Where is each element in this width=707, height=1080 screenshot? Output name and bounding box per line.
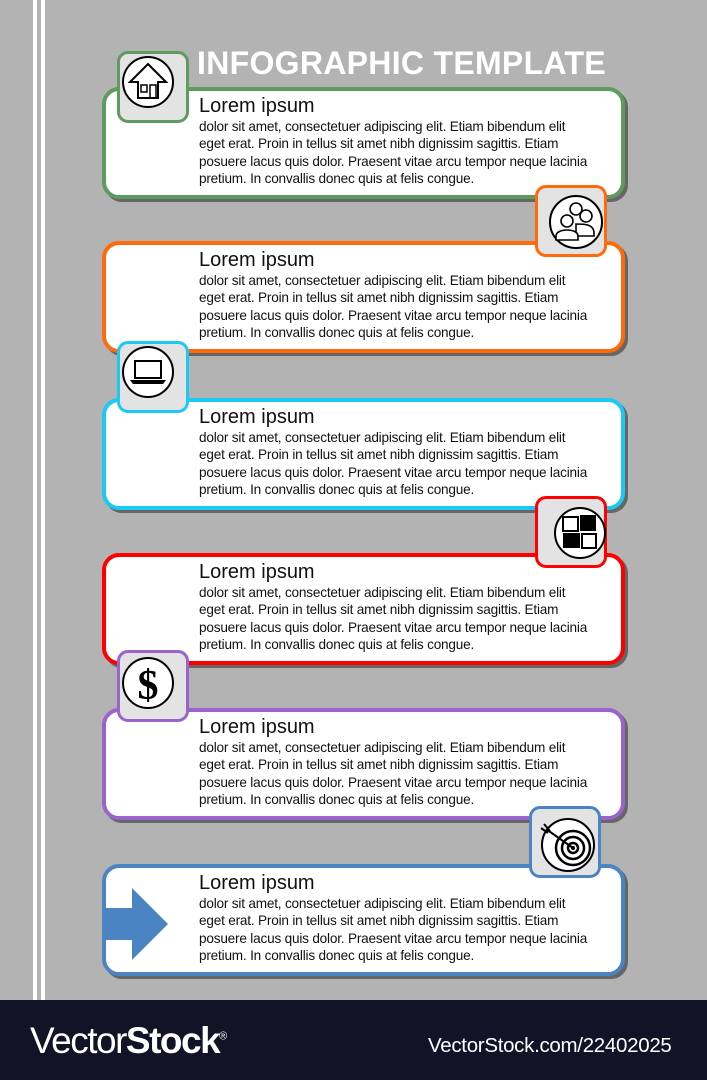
icon: people — [535, 185, 607, 257]
text block red: dolor sit amet, consectetuer adipiscing elit. Etiam bibendum elit — [199, 585, 565, 600]
panel: green — [102, 87, 625, 199]
text block blue: pretium. In convallis donec quis at felis congue. — [199, 948, 474, 963]
title: INFOGRAPHIC TEMPLATE — [197, 45, 606, 81]
text block orange: dolor sit amet, consectetuer adipiscing elit. Etiam bibendum elit — [199, 273, 565, 288]
panel: orange — [102, 241, 625, 353]
text block green: pretium. In convallis donec quis at felis congue. — [199, 171, 474, 186]
text block blue: posuere lacus quis dolor. Praesent vitae arcu tempor neque lacinia — [199, 931, 587, 946]
text block green: posuere lacus quis dolor. Praesent vitae arcu tempor neque lacinia — [199, 154, 587, 169]
text block orange: pretium. In convallis donec quis at felis congue. — [199, 325, 474, 340]
text block blue: Lorem ipsum — [199, 872, 315, 894]
icon: puzzle — [535, 496, 607, 568]
text block cyan: posuere lacus quis dolor. Praesent vitae arcu tempor neque lacinia — [199, 465, 587, 480]
panel: purple — [102, 708, 625, 820]
text block green: dolor sit amet, consectetuer adipiscing elit. Etiam bibendum elit — [199, 119, 565, 134]
text block orange — [199, 249, 588, 340]
text block cyan: pretium. In convallis donec quis at felis congue. — [199, 482, 474, 497]
logo: VectorStock® — [30, 1020, 226, 1061]
text block cyan: eget erat. Proin in tellus sit amet nibh dignissim sagittis. Etiam — [199, 447, 558, 462]
text block purple: posuere lacus quis dolor. Praesent vitae arcu tempor neque lacinia — [199, 775, 587, 790]
text block red: Lorem ipsum — [199, 561, 315, 583]
arrow — [106, 888, 168, 960]
text block cyan — [199, 406, 588, 497]
text block cyan: dolor sit amet, consectetuer adipiscing elit. Etiam bibendum elit — [199, 430, 565, 445]
panel: red — [102, 553, 625, 665]
text block red: posuere lacus quis dolor. Praesent vitae arcu tempor neque lacinia — [199, 620, 587, 635]
panel: cyan — [102, 398, 625, 510]
icon: target — [529, 806, 601, 878]
footer — [0, 1000, 707, 1080]
text block red: eget erat. Proin in tellus sit amet nibh dignissim sagittis. Etiam — [199, 602, 558, 617]
text block purple: pretium. In convallis donec quis at felis congue. — [199, 792, 474, 807]
text block orange: posuere lacus quis dolor. Praesent vitae arcu tempor neque lacinia — [199, 308, 587, 323]
text block red — [199, 561, 588, 652]
url: VectorStock.com/22402025 — [428, 1034, 672, 1057]
icon: laptop — [117, 341, 189, 413]
text block purple: eget erat. Proin in tellus sit amet nibh dignissim sagittis. Etiam — [199, 757, 558, 772]
text block green: eget erat. Proin in tellus sit amet nibh dignissim sagittis. Etiam — [199, 136, 558, 151]
text block purple: dolor sit amet, consectetuer adipiscing elit. Etiam bibendum elit — [199, 740, 565, 755]
icon: dollar — [117, 650, 189, 722]
text block purple: Lorem ipsum — [199, 716, 315, 738]
text block purple — [199, 716, 588, 807]
text block blue: dolor sit amet, consectetuer adipiscing elit. Etiam bibendum elit — [199, 896, 565, 911]
text block cyan: Lorem ipsum — [199, 406, 315, 428]
icon: house — [117, 51, 189, 123]
text block blue — [199, 872, 588, 963]
text block orange: Lorem ipsum — [199, 249, 315, 271]
text block blue: eget erat. Proin in tellus sit amet nibh dignissim sagittis. Etiam — [199, 913, 558, 928]
text block red: pretium. In convallis donec quis at felis congue. — [199, 637, 474, 652]
text block orange: eget erat. Proin in tellus sit amet nibh dignissim sagittis. Etiam — [199, 290, 558, 305]
panel: blue — [102, 864, 625, 976]
text block green: Lorem ipsum — [199, 95, 315, 117]
icon: dollar: $ — [138, 663, 158, 709]
text block green — [199, 95, 588, 186]
